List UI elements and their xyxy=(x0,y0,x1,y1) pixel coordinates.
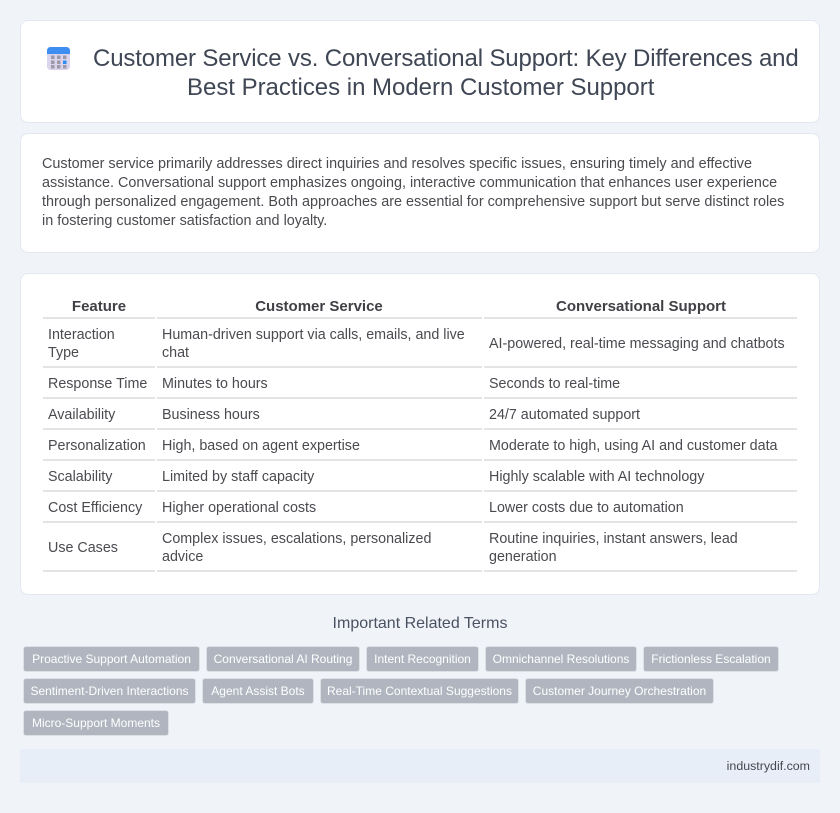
footer source text: industrydif.com xyxy=(727,759,810,773)
row: personalization: High, based on agent expertise xyxy=(162,438,360,454)
tag: Agent Assist Bots xyxy=(211,684,305,698)
row: scalability xyxy=(48,469,704,485)
tag xyxy=(206,646,360,672)
row: use cases: Routine inquiries, instant answers, lead xyxy=(489,531,738,547)
row: cost efficiency xyxy=(48,500,684,516)
row: use cases: Complex issues, escalations, personalized xyxy=(162,531,431,547)
tag: Proactive Support Automation xyxy=(32,652,191,666)
intro text: assistance. Conversational support emphasizes ongoing, interactive communication that enhances user experience xyxy=(42,175,777,191)
row: scalability: Limited by staff capacity xyxy=(162,469,314,485)
row: personalization xyxy=(48,438,778,454)
tag: Sentiment-Driven Interactions xyxy=(30,684,189,698)
row: cost efficiency: Cost Efficiency xyxy=(48,500,142,516)
comparison table xyxy=(43,298,797,572)
row: response time: Response Time xyxy=(48,376,147,392)
tag xyxy=(23,678,196,704)
row: availability: 24/7 automated support xyxy=(489,407,640,423)
row: personalization: Moderate to high, using AI and customer data xyxy=(489,438,778,454)
intro text: Customer service primarily addresses direct inquiries and resolves specific issues, ensuring timely and effective xyxy=(42,156,752,172)
row: cost efficiency: Higher operational costs xyxy=(162,500,316,516)
tag xyxy=(643,646,779,672)
row: interaction type: chat xyxy=(162,345,189,361)
tag: Omnichannel Resolutions xyxy=(493,652,629,666)
footer bar xyxy=(20,749,820,783)
row: use cases: generation xyxy=(489,549,557,565)
row: response time: Minutes to hours xyxy=(162,376,268,392)
tag: Customer Journey Orchestration xyxy=(533,684,706,698)
row: scalability: Highly scalable with AI technology xyxy=(489,469,704,485)
row: interaction type: Type xyxy=(48,345,79,361)
tag xyxy=(202,678,314,704)
related term tags xyxy=(23,646,779,736)
tag xyxy=(485,646,637,672)
title line 2: Best Practices in Modern Customer Support xyxy=(187,74,654,101)
row: use cases xyxy=(48,531,738,565)
row: interaction type xyxy=(48,327,785,361)
row: interaction type: AI-powered, real-time messaging and chatbots xyxy=(489,336,785,352)
tag: Intent Recognition xyxy=(374,652,471,666)
row: use cases: advice xyxy=(162,549,203,565)
tag xyxy=(525,678,714,704)
tag: Real-Time Contextual Suggestions xyxy=(327,684,512,698)
tag xyxy=(23,710,169,736)
panel: comparison table xyxy=(20,273,820,595)
row: use cases: Use Cases xyxy=(48,540,118,556)
row: cost efficiency: Lower costs due to automation xyxy=(489,500,684,516)
tag xyxy=(366,646,479,672)
row: scalability: Scalability xyxy=(48,469,112,485)
intro text: in fostering customer satisfaction and loyalty. xyxy=(42,213,327,229)
row: personalization: Personalization xyxy=(48,438,146,454)
row: response time xyxy=(48,376,620,392)
table header row: Feature xyxy=(72,298,126,315)
table header row: Conversational Support xyxy=(556,298,726,315)
intro text xyxy=(42,156,784,229)
row: interaction type: Human-driven support via calls, emails, and live xyxy=(162,327,465,343)
panel: title card xyxy=(20,20,820,123)
row: availability: Availability xyxy=(48,407,115,423)
tag: Micro-Support Moments xyxy=(32,716,160,730)
icon: calendar xyxy=(47,47,70,70)
tag: Conversational AI Routing xyxy=(214,652,352,666)
row: response time: Seconds to real-time xyxy=(489,376,620,392)
table header row: Customer Service xyxy=(255,298,383,315)
row: availability: Business hours xyxy=(162,407,260,423)
row: availability xyxy=(48,407,640,423)
title line 1: Customer Service vs. Conversational Support: Key Differences and xyxy=(93,45,799,72)
panel: introduction xyxy=(20,133,820,253)
intro text: through personalized engagement. Both approaches are essential for comprehensive support but serve distinct roles xyxy=(42,194,784,210)
tag: Frictionless Escalation xyxy=(651,652,771,666)
heading: important related terms: Important Related Terms xyxy=(333,615,507,632)
tag xyxy=(320,678,519,704)
table header row xyxy=(72,298,726,315)
row: interaction type: Interaction xyxy=(48,327,115,343)
tag xyxy=(23,646,200,672)
